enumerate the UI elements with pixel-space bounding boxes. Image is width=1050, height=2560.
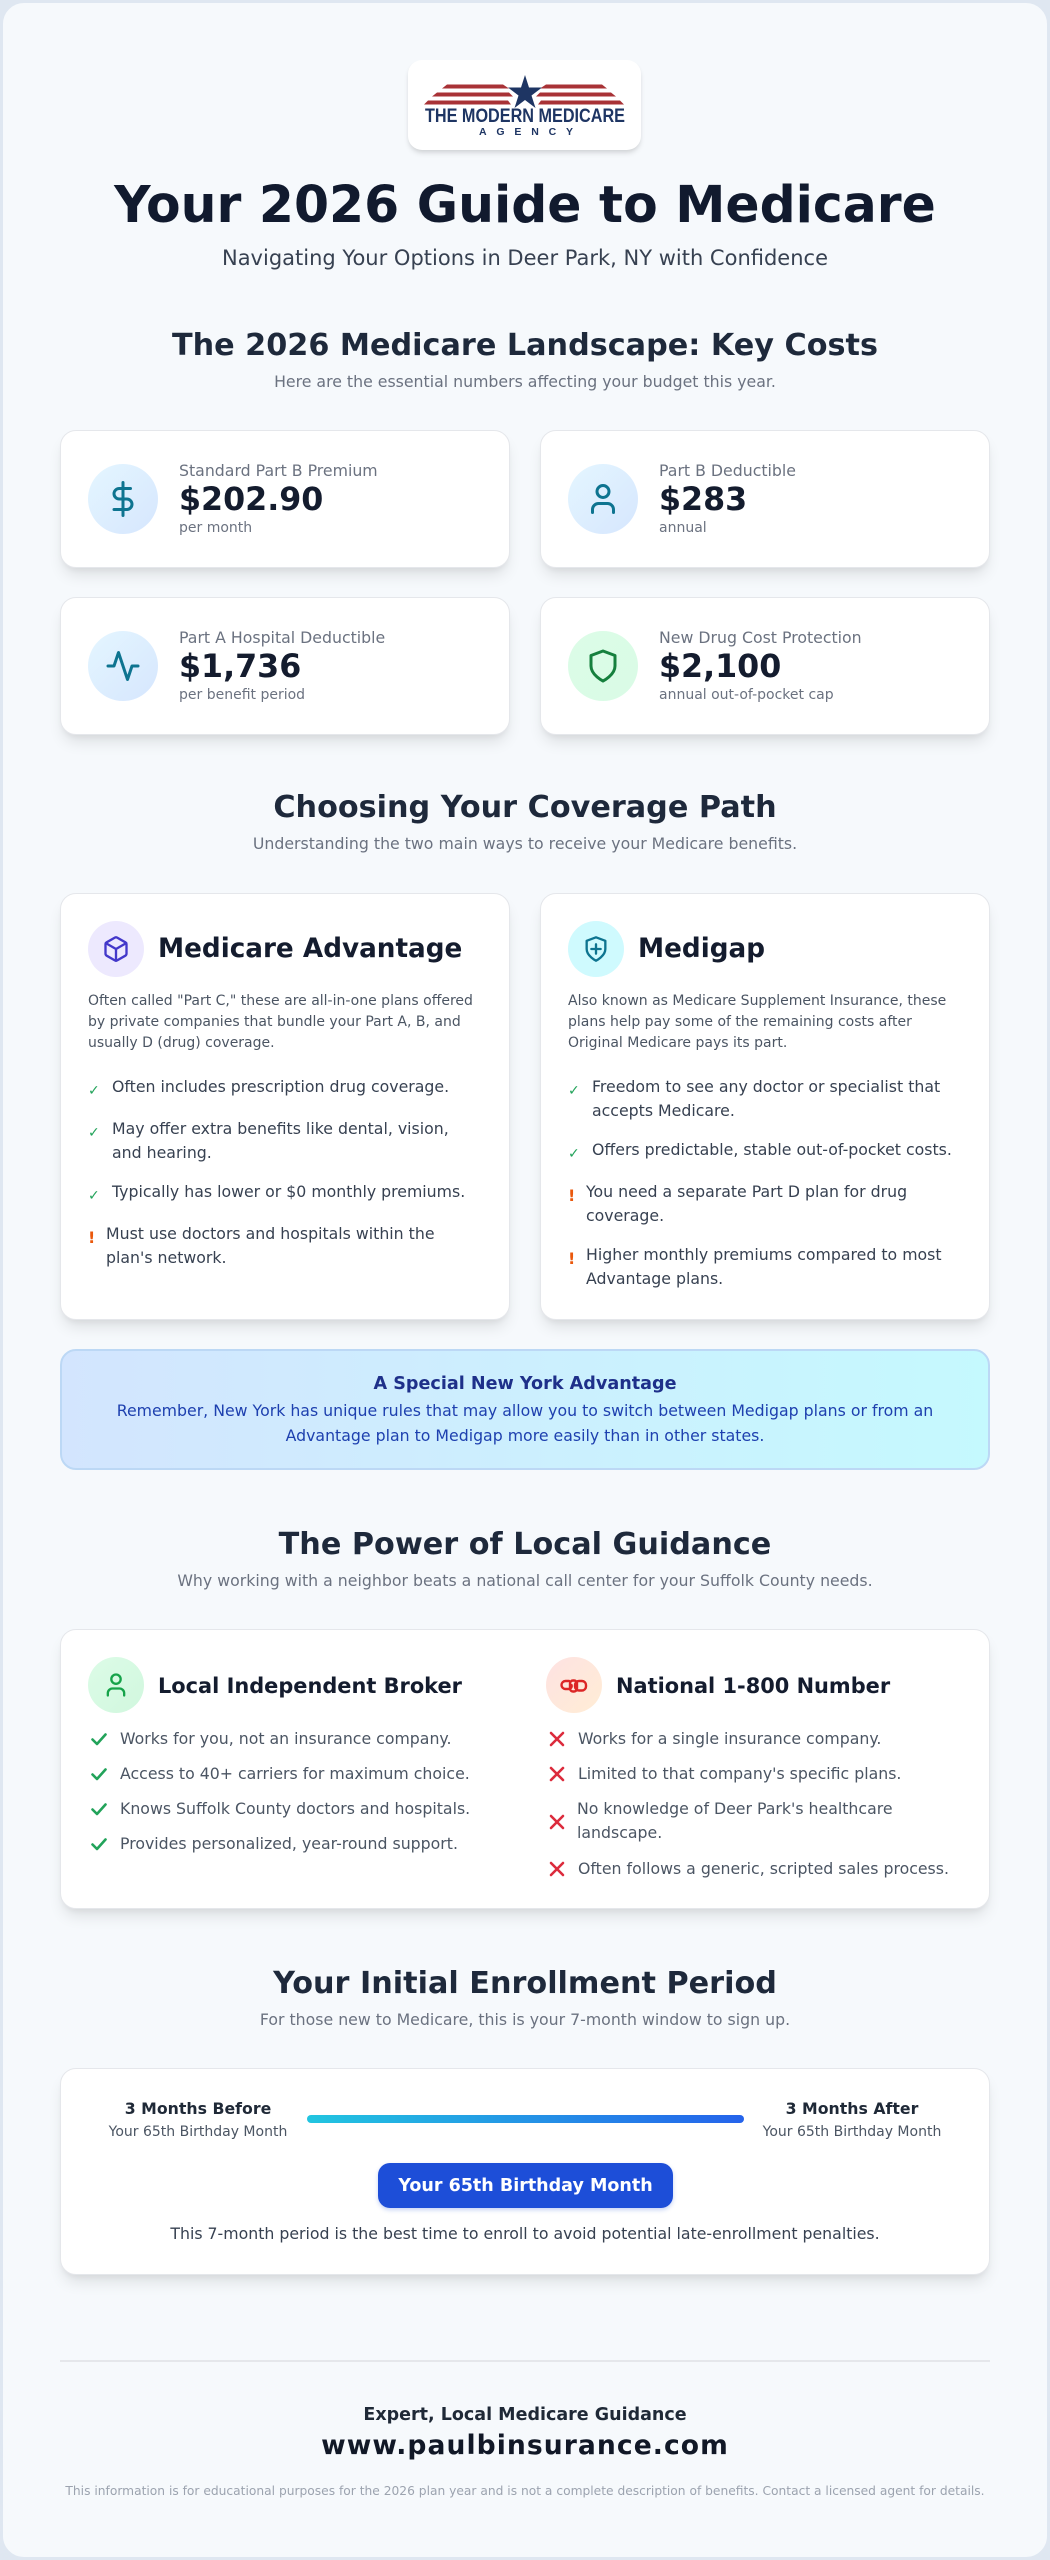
label: Part B Deductible	[659, 461, 796, 480]
description: and hearing.	[112, 1143, 212, 1162]
value: $2,100	[659, 649, 781, 685]
stat card: Part A deductible	[60, 597, 510, 735]
heading: key costs: The 2026 Medicare Landscape: Key Costs	[172, 328, 878, 363]
icon: person	[568, 464, 638, 534]
value: $283	[659, 482, 747, 518]
broker list: Works for you, not an insurance company.	[120, 1729, 452, 1748]
panel: Medicare Advantage	[60, 893, 510, 1320]
unit: per month	[179, 520, 252, 536]
description: usually D (drug) coverage.	[88, 1035, 275, 1051]
timeline bar	[307, 2115, 744, 2123]
description: !	[568, 1186, 575, 1205]
icon: activity	[88, 631, 158, 701]
disclaimer: This information is for educational purposes for the 2026 plan year and is not a complete description of benefits. Contact a licensed agent for details.	[65, 2484, 985, 2498]
description: Higher monthly premiums compared to most	[586, 1245, 942, 1264]
description	[88, 993, 473, 1267]
description: Typically has lower or $0 monthly premiums.	[112, 1182, 465, 1201]
national title: National 1-800 Number	[616, 1674, 890, 1698]
callout: New York advantage	[60, 1349, 990, 1470]
panel title: Medicare Advantage	[158, 934, 462, 964]
description: Offers predictable, stable out-of-pocket costs.	[592, 1140, 952, 1159]
subheading: enrollment: For those new to Medicare, this is your 7-month window to sign up.	[260, 2010, 790, 2029]
description: You need a separate Part D plan for drug	[586, 1182, 907, 1201]
description: Original Medicare pays its part.	[568, 1035, 787, 1051]
label: Standard Part B Premium	[179, 461, 378, 480]
description: ✓	[568, 1083, 580, 1099]
description: plan's network.	[106, 1248, 227, 1267]
after label: 3 Months After	[786, 2099, 918, 2118]
callout body: Remember, New York has unique rules that may allow you to switch between Medigap plans or from an	[117, 1401, 933, 1420]
unit: annual out-of-pocket cap	[659, 687, 834, 703]
footer tagline: Expert, Local Medicare Guidance	[363, 2405, 687, 2425]
description: Also known as Medicare Supplement Insurance, these	[568, 993, 946, 1009]
subtitle: Navigating Your Options in Deer Park, NY with Confidence	[222, 246, 828, 270]
description: ✓	[568, 1146, 580, 1162]
broker list: Knows Suffolk County doctors and hospitals.	[120, 1799, 470, 1818]
unit: annual	[659, 520, 707, 536]
description: !	[88, 1228, 95, 1247]
broker list: Access to 40+ carriers for maximum choice.	[120, 1764, 470, 1783]
panel: Medigap	[540, 893, 990, 1320]
heading: enrollment: Your Initial Enrollment Period	[273, 1966, 777, 2001]
description: ✓	[88, 1083, 100, 1099]
panel title: Medigap	[638, 934, 765, 964]
timeline note: This 7-month period is the best time to enroll to avoid potential late-enrollment penalties.	[170, 2224, 880, 2243]
footer website: www.paulbinsurance.com	[321, 2430, 729, 2461]
national list: Often follows a generic, scripted sales process.	[578, 1859, 949, 1878]
stat card: drug cost protection	[540, 597, 990, 735]
description: ✓	[88, 1125, 100, 1141]
broker title: Local Independent Broker	[158, 1674, 462, 1698]
birthday month button: Your 65th Birthday Month	[398, 2176, 653, 2196]
subheading: coverage path: Understanding the two main ways to receive your Medicare benefits.	[253, 834, 797, 853]
callout body	[117, 1401, 933, 1445]
after label	[762, 2099, 941, 2140]
title: Your 2026 Guide to Medicare	[114, 175, 936, 234]
subheading: local guidance: Why working with a neighbor beats a national call center for your Suffolk County needs.	[177, 1571, 873, 1590]
panel: broker comparison	[60, 1629, 990, 1909]
icon: shield plus	[568, 921, 624, 977]
icon: national number	[546, 1657, 602, 1713]
national list	[550, 1729, 949, 1878]
description: Often includes prescription drug coverage.	[112, 1077, 449, 1096]
description: coverage.	[586, 1206, 664, 1225]
subheading: key costs: Here are the essential numbers affecting your budget this year.	[274, 372, 776, 391]
value: $1,736	[179, 649, 301, 685]
description: Freedom to see any doctor or specialist that	[592, 1077, 940, 1096]
description: accepts Medicare.	[592, 1101, 735, 1120]
national list: landscape.	[577, 1823, 662, 1842]
icon: shield	[568, 631, 638, 701]
label: Part A Hospital Deductible	[179, 628, 385, 647]
description: ✓	[88, 1188, 100, 1204]
description: Must use doctors and hospitals within the	[106, 1224, 435, 1243]
stat card: Part B deductible	[540, 430, 990, 568]
birthday month button	[378, 2163, 673, 2208]
national list: No knowledge of Deer Park's healthcare	[577, 1799, 893, 1818]
icon: broker person	[88, 1657, 144, 1713]
broker list	[91, 1729, 470, 1853]
panel: enrollment timeline	[60, 2068, 990, 2275]
before label: Your 65th Birthday Month	[109, 2124, 287, 2140]
description: by private companies that bundle your Part A, B, and	[88, 1014, 461, 1030]
logo badge: AGENCY	[479, 126, 573, 138]
before label: 3 Months Before	[125, 2099, 271, 2118]
label: New Drug Cost Protection	[659, 628, 862, 647]
heading: coverage path: Choosing Your Coverage Path	[273, 790, 777, 825]
icon: dollar	[88, 464, 158, 534]
before label	[108, 2099, 287, 2140]
heading: local guidance: The Power of Local Guidance	[279, 1527, 771, 1562]
icon: box	[88, 921, 144, 977]
national list: Works for a single insurance company.	[578, 1729, 881, 1748]
unit: per benefit period	[179, 687, 305, 703]
stat card: Part B premium	[60, 430, 510, 568]
callout title: A Special New York Advantage	[373, 1374, 677, 1394]
national list: Limited to that company's specific plans.	[578, 1764, 901, 1783]
broker list: Provides personalized, year-round support.	[120, 1834, 458, 1853]
description: !	[568, 1249, 575, 1268]
description: Often called "Part C," these are all-in-one plans offered	[88, 993, 473, 1009]
after label: Your 65th Birthday Month	[763, 2124, 941, 2140]
description	[568, 993, 952, 1288]
logo badge	[408, 60, 641, 150]
description: May offer extra benefits like dental, vision,	[112, 1119, 449, 1138]
value: $202.90	[179, 482, 323, 518]
description: plans help pay some of the remaining costs after	[568, 1014, 912, 1030]
description: Advantage plans.	[586, 1269, 723, 1288]
callout body: Advantage plan to Medigap more easily than in other states.	[286, 1426, 764, 1445]
